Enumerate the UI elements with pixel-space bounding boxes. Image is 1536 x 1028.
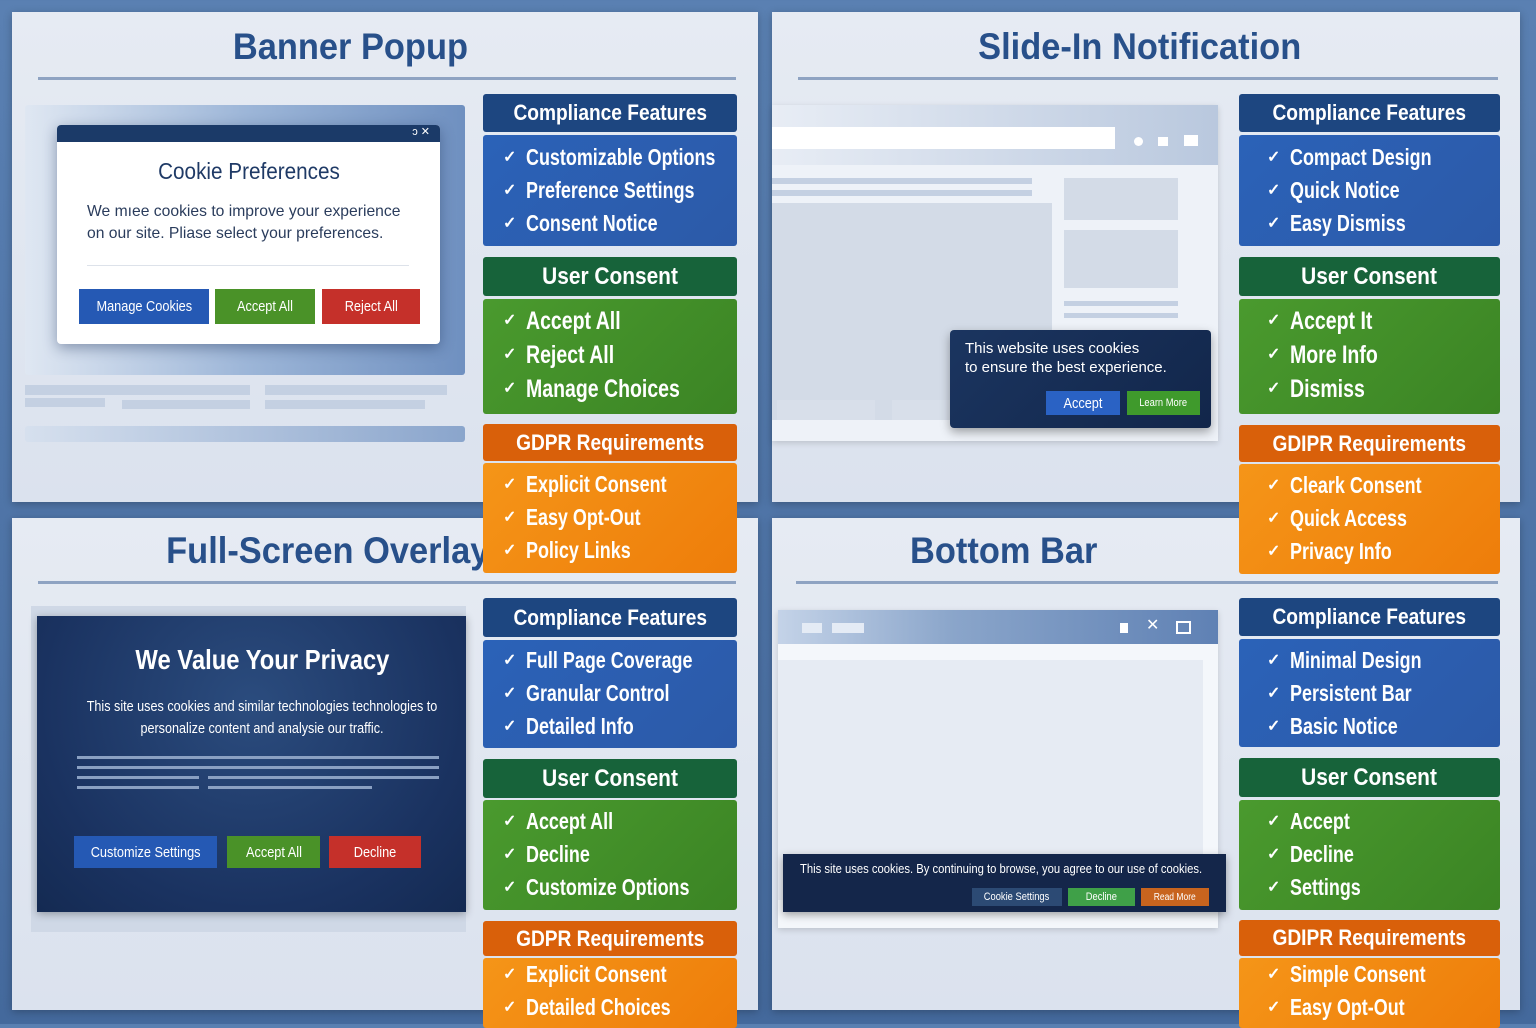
panel: slide-in notification [772,12,1520,502]
column: banner popup features: Customizable Options [526,144,716,170]
column: banner popup features: Reject All [526,341,615,369]
column: full-screen overlay features: Explicit Consent [526,961,667,987]
column: slide-in features: Privacy Info [1290,538,1392,564]
column: full-screen overlay features: User Consent [542,764,678,792]
column: banner popup features: Consent Notice [526,210,658,236]
mockup: banner popup [25,105,465,442]
title: slide-in notification: Slide-In Notification [978,26,1302,67]
column: slide-in features: Quick Access [1290,505,1407,531]
column: banner popup features: Policy Links [526,537,631,563]
column: full-screen overlay features: Accept All [526,808,613,834]
popup dialog: ɔ ✕ [412,126,430,138]
column: bottom bar features: Easy Opt-Out [1290,994,1405,1020]
column: slide-in features: Cleark Consent [1290,472,1422,498]
column: slide-in features: GDIPR Requirements [1273,430,1466,456]
column: banner popup features: Preference Settings [526,177,695,203]
column: full-screen overlay features: Granular Control [526,680,670,706]
column: bottom bar features: Basic Notice [1290,713,1398,739]
popup dialog: Accept All [237,298,293,315]
column: bottom bar features: Minimal Design [1290,647,1422,673]
column: slide-in features: User Consent [1302,262,1437,290]
column: slide-in features: Compliance Features [1273,100,1466,125]
column: full-screen overlay features: Detailed Info [526,713,634,739]
column: banner popup features [483,94,737,573]
column: banner popup features: Explicit Consent [526,471,667,497]
mockup: full-screen overlay: Customize Settings [91,844,200,860]
mockup: full-screen overlay: This site uses cookies and similar technologies technologies to [87,699,437,715]
column: bottom bar features: User Consent [1302,764,1437,790]
mockup: bottom bar: ✕ [1146,617,1159,634]
column: full-screen overlay features: Compliance Features [513,604,707,630]
column: full-screen overlay features: Decline [526,841,590,867]
column: banner popup features: Accept All [526,307,621,335]
column: banner popup features: User Consent [542,262,678,290]
column: slide-in features: Dismiss [1290,375,1365,403]
mockup: full-screen overlay: Decline [354,844,396,860]
column: slide-in features: Easy Dismiss [1290,210,1406,236]
title: bottom bar: Bottom Bar [910,530,1098,571]
mockup: full-screen overlay: Accept All [246,844,301,860]
popup dialog: Cookie Preferences [158,158,339,184]
popup dialog: We mıee cookies to improve your experience [87,203,400,220]
title: full-screen overlay: Full-Screen Overlay [166,530,490,571]
column: full-screen overlay features: Full Page Coverage [526,647,693,673]
column: bottom bar features: Settings [1290,874,1361,900]
column: bottom bar features: Simple Consent [1290,961,1426,987]
notification card: Accept [1064,394,1102,412]
panel: full-screen overlay [12,518,758,1010]
column: slide-in features: Compact Design [1290,144,1432,170]
column: full-screen overlay features: Detailed Choices [526,994,671,1020]
column: banner popup features: GDPR Requirements [516,430,704,454]
mockup: slide-in notification [772,105,1218,441]
mockup: full-screen overlay: We Value Your Privacy [135,644,389,675]
notification card: Learn More [1140,397,1187,409]
column: slide-in features: More Info [1290,341,1378,369]
cookie bar: Decline [1086,891,1117,903]
panel: banner popup [12,12,758,502]
notification card: to ensure the best experience. [965,359,1167,376]
column: bottom bar features: GDIPR Requirements [1273,925,1466,950]
column: full-screen overlay features [483,598,737,1028]
mockup: bottom bar [778,610,1218,928]
column: bottom bar features: Persistent Bar [1290,680,1412,706]
column: full-screen overlay features: Customize Options [526,874,690,900]
mockup: full-screen overlay: personalize content and analysie our traffic. [140,721,384,737]
title: banner popup: Banner Popup [232,26,468,67]
popup dialog: Manage Cookies [96,298,192,315]
cookie bar: Cookie Settings [984,891,1050,903]
cookie bar: Read More [1154,892,1196,902]
popup dialog: Reject All [344,298,398,315]
cookie bar [783,854,1226,912]
column: slide-in features [1239,94,1500,574]
column: slide-in features: Quick Notice [1290,177,1400,203]
column: bottom bar features [1239,598,1500,1028]
cookie bar: This site uses cookies. By continuing to browse, you agree to our use of cookies. [800,862,1202,876]
column: bottom bar features: Compliance Features [1273,604,1466,629]
column: bottom bar features: Accept [1290,808,1350,834]
column: banner popup features: Easy Opt-Out [526,504,641,530]
notification card [950,330,1211,428]
column: banner popup features: Manage Choices [526,375,680,403]
column: bottom bar features: Decline [1290,841,1354,867]
column: banner popup features: Compliance Features [513,100,707,125]
mockup: full-screen overlay [31,606,466,932]
panel: bottom bar [772,518,1520,1010]
popup dialog: on our site. Pliase select your preferences. [87,225,383,242]
popup dialog [57,125,440,344]
column: slide-in features: Accept It [1290,307,1373,335]
column: full-screen overlay features: GDPR Requirements [516,926,704,950]
notification card: This website uses cookies [965,340,1139,357]
